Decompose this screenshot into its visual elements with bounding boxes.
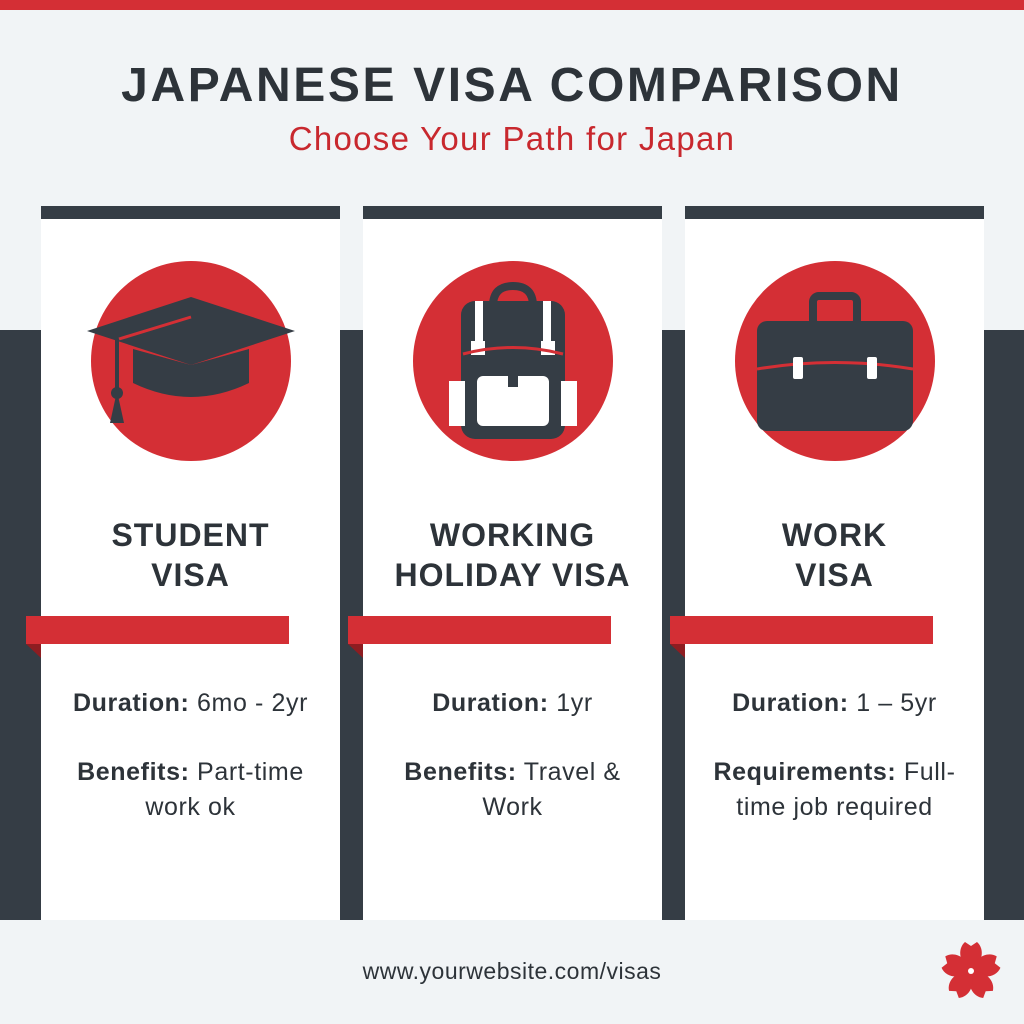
text: benefits <box>404 758 621 821</box>
heading: working holiday visa <box>394 517 631 593</box>
heading: student visa: STUDENT <box>111 517 270 553</box>
icon: backpack <box>413 261 613 461</box>
panel: working holiday visa <box>363 206 662 920</box>
ribbon <box>26 616 289 644</box>
heading: working holiday visa: HOLIDAY VISA <box>394 557 631 593</box>
text: benefits: Benefits: Part-time work ok <box>77 758 304 821</box>
text: benefits: Benefits: Travel & <box>404 758 621 786</box>
ribbon <box>670 616 933 644</box>
text: duration: Duration: 1yr <box>432 689 593 717</box>
heading: work visa: WORK <box>782 517 887 553</box>
heading: work visa: VISA <box>795 557 874 593</box>
ribbon <box>348 616 611 644</box>
panel: student visa <box>41 206 340 920</box>
text: duration: Duration: 6mo - 2yr <box>73 689 308 717</box>
text: benefits: Work <box>482 793 543 821</box>
icon: graduation cap <box>91 261 291 461</box>
heading: student visa <box>111 517 270 593</box>
footer url: www.yourwebsite.com/visas <box>363 958 661 984</box>
text: requirements <box>714 758 956 821</box>
text: duration: Duration: 1 – 5yr <box>732 689 937 717</box>
icon: sakura <box>942 942 1000 998</box>
icon: briefcase <box>735 261 935 461</box>
title: JAPANESE VISA COMPARISON <box>121 59 903 112</box>
dark band <box>0 330 1024 920</box>
panel: work visa <box>685 206 984 920</box>
text: requirements: time job required <box>736 793 933 821</box>
heading: student visa: VISA <box>151 557 230 593</box>
heading: working holiday visa: WORKING <box>430 517 595 553</box>
text: requirements: Requirements: Full- <box>714 758 956 786</box>
heading: work visa <box>782 517 887 593</box>
subtitle: Choose Your Path for Japan <box>289 120 735 157</box>
top red bar <box>0 0 1024 10</box>
